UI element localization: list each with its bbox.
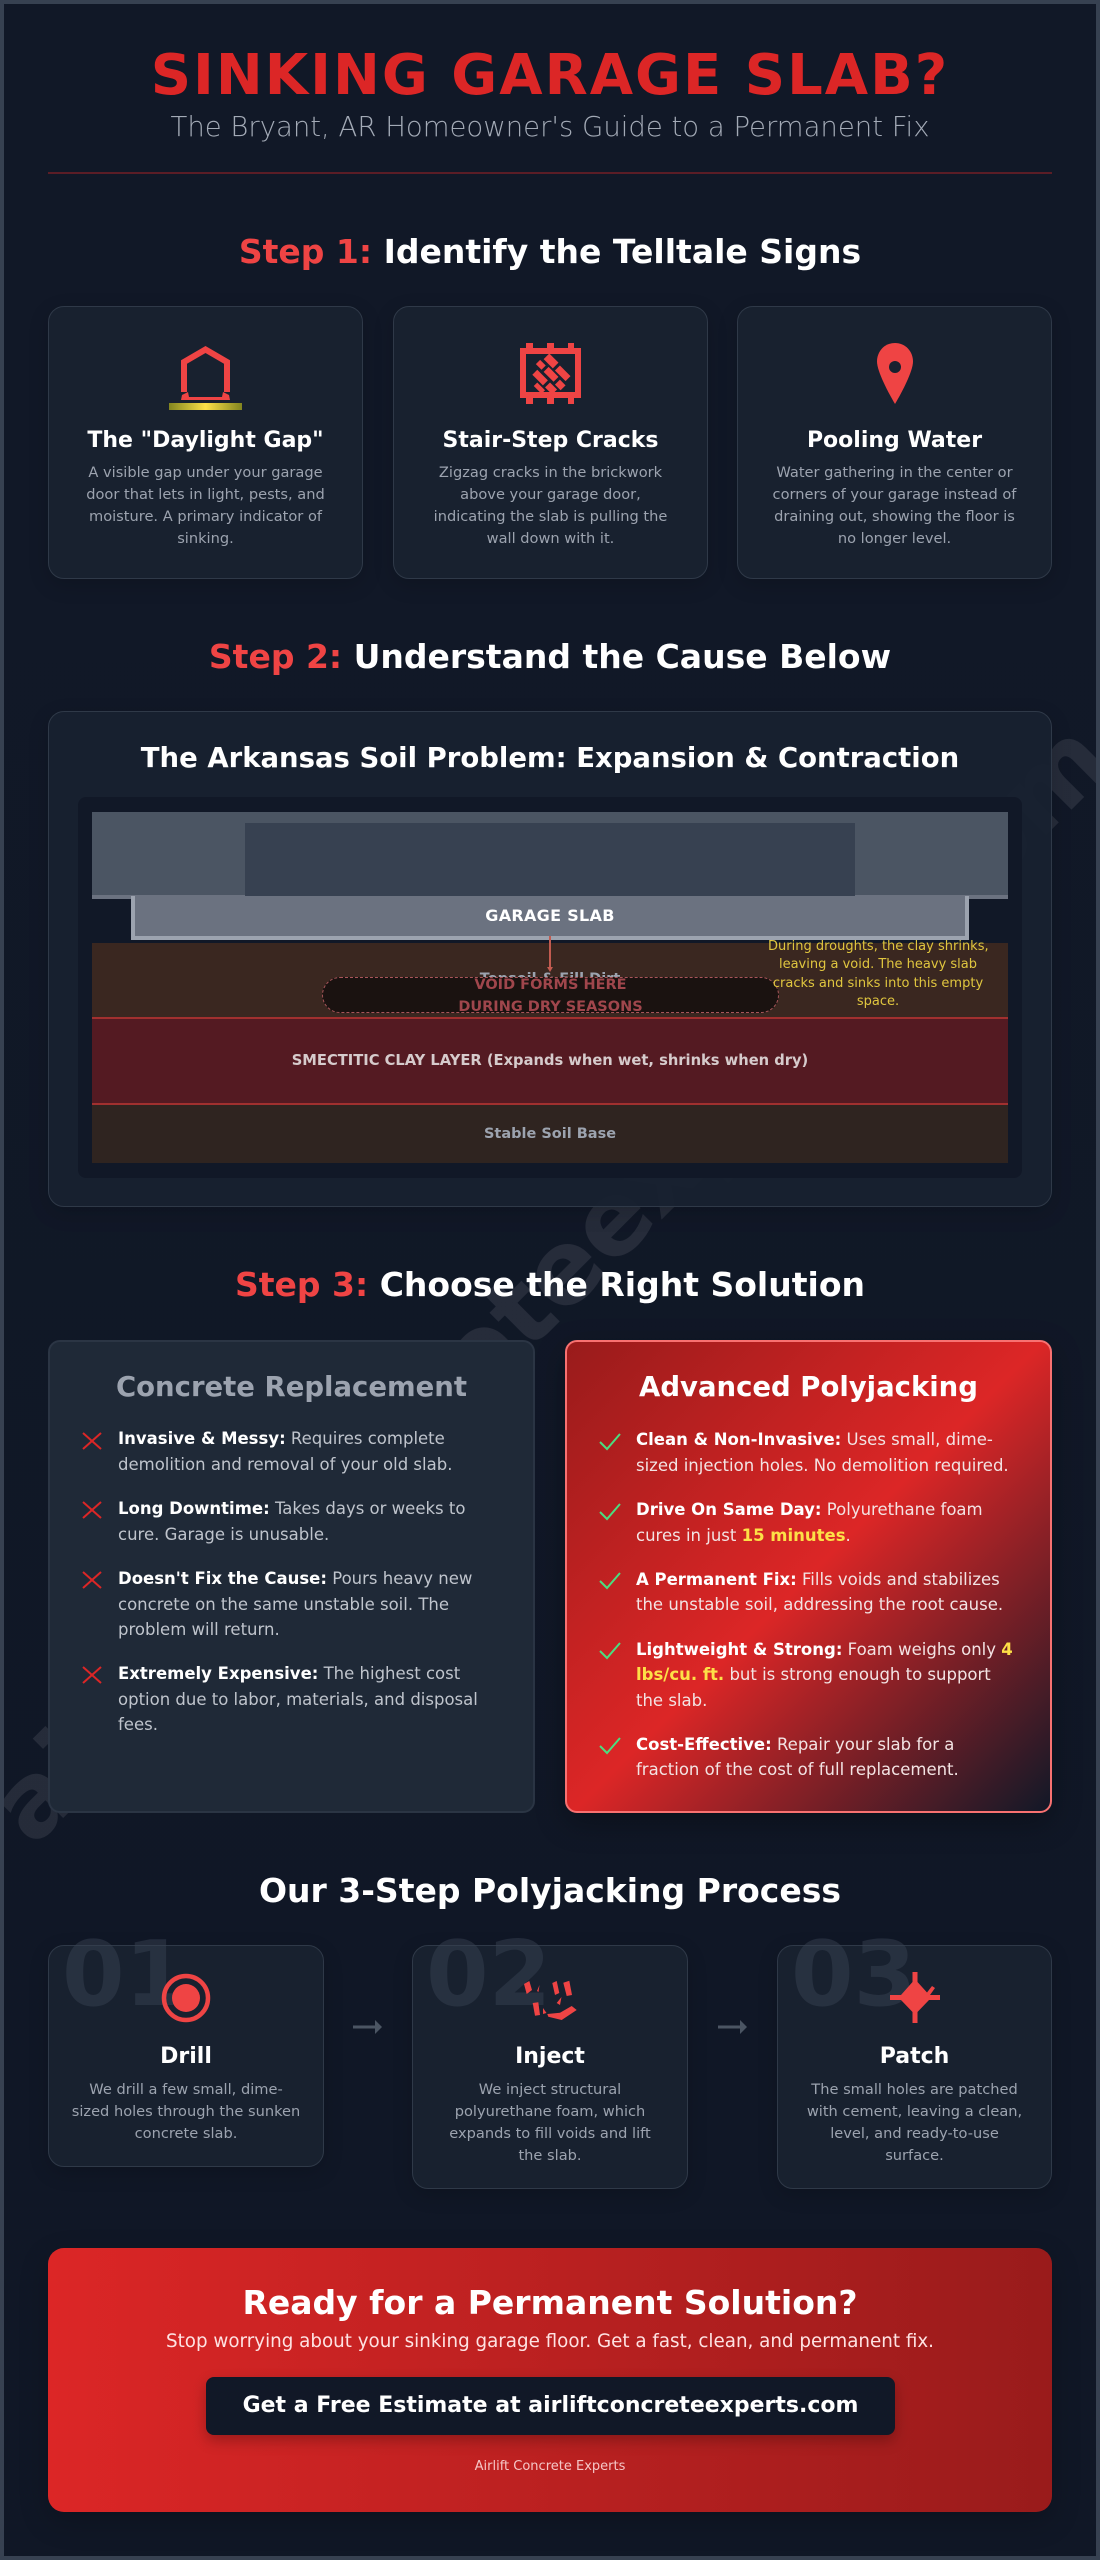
step description: the slab. xyxy=(518,2147,582,2164)
garage slab xyxy=(131,896,969,940)
item: clean xyxy=(636,1430,1009,1475)
item: expensive: Extremely Expensive: The highest cost xyxy=(118,1664,460,1683)
drought callout: space. xyxy=(857,994,899,1009)
icon: x xyxy=(82,1501,102,1519)
card description: indicating the slab is pulling the xyxy=(434,508,667,525)
card description: sinking. xyxy=(177,530,234,547)
icon: x xyxy=(82,1666,102,1684)
panel: advanced polyjacking xyxy=(565,1340,1052,1813)
garage slab: GARAGE SLAB xyxy=(485,906,615,925)
icon: check xyxy=(599,1737,621,1754)
subtitle: The Bryant, AR Homeowner's Guide to a Permanent Fix xyxy=(171,111,929,143)
icon: x xyxy=(82,1571,102,1589)
item: same day xyxy=(636,1500,983,1545)
step description: level, and ready-to-use xyxy=(830,2125,999,2142)
arrow: step 1 to 2 xyxy=(353,2020,382,2034)
icon: cracked brick wall xyxy=(520,343,581,404)
step title: Drill xyxy=(160,2044,212,2069)
card description: door that lets in light, pests, and xyxy=(86,486,325,503)
panel heading: Concrete Replacement xyxy=(116,1371,467,1403)
item: downtime: Long Downtime: Takes days or weeks to xyxy=(118,1499,465,1518)
step number 02: 02 xyxy=(426,1922,551,2027)
panel: sign pooling water xyxy=(737,306,1052,579)
item: cause xyxy=(118,1569,472,1639)
drought callout: cracks and sinks into this empty xyxy=(773,976,983,991)
wall section xyxy=(92,812,1008,899)
item: permanent: the unstable soil, addressing the root cause. xyxy=(636,1595,1003,1614)
icon: drill hole xyxy=(162,1974,210,2022)
arrow: step 2 to 3 xyxy=(718,2020,747,2034)
drought callout xyxy=(768,939,989,1009)
item: same day: cures in just 15 minutes. xyxy=(636,1526,851,1545)
item: permanent: A Permanent Fix: Fills voids and stabilizes xyxy=(636,1570,1000,1588)
item: invasive: Invasive & Messy: Requires complete xyxy=(118,1429,445,1448)
cta button: Get a Free Estimate at airliftconcreteexperts.com xyxy=(243,2393,858,2418)
step number 03: 03 xyxy=(791,1922,916,2027)
topsoil layer xyxy=(92,943,1008,1018)
icon: foam injection xyxy=(524,1980,577,2020)
heading: process: Our 3-Step Polyjacking Process xyxy=(259,1871,841,1910)
step description: expands to fill voids and lift xyxy=(449,2125,651,2142)
card description xyxy=(773,464,1017,547)
step description: The small holes are patched xyxy=(811,2081,1018,2098)
step description xyxy=(72,2081,300,2142)
step description: concrete slab. xyxy=(135,2125,237,2142)
card title: Stair-Step Cracks xyxy=(442,428,659,453)
heading: step 3: Step 3: Choose the Right Solution xyxy=(235,1265,865,1304)
item: invasive xyxy=(118,1429,452,1474)
card title: The "Daylight Gap" xyxy=(87,428,324,453)
icon: patch xyxy=(890,1972,940,2023)
item: same day: Drive On Same Day: Polyurethane foam xyxy=(636,1500,983,1519)
item: downtime xyxy=(118,1499,465,1544)
card description: wall down with it. xyxy=(487,530,614,547)
diagram heading: The Arkansas Soil Problem: Expansion & Contraction xyxy=(141,742,959,774)
cta subtext: Stop worrying about your sinking garage floor. Get a fast, clean, and permanent fix. xyxy=(166,2331,934,2352)
item: expensive: option due to labor, materials, and disposal xyxy=(118,1690,478,1709)
chart: soil cross-section xyxy=(78,797,1022,1178)
void under slab xyxy=(322,977,779,1013)
panel: process step 3 xyxy=(777,1945,1052,2189)
clay layer xyxy=(92,1017,1008,1105)
item: cost: Cost-Effective: Repair your slab for a xyxy=(636,1734,954,1754)
step number 01: 01 xyxy=(62,1922,187,2027)
drought callout: During droughts, the clay shrinks, xyxy=(768,939,989,954)
stable soil layer: Stable Soil Base xyxy=(484,1126,616,1142)
icon: check xyxy=(599,1503,621,1520)
footer brand: Airlift Concrete Experts xyxy=(475,2459,625,2474)
step description: We inject structural xyxy=(479,2081,621,2098)
item: cause: concrete on the same unstable soil. The xyxy=(118,1595,449,1614)
step description: sized holes through the sunken xyxy=(72,2103,300,2120)
cta button xyxy=(206,2377,895,2435)
void label: DURING DRY SEASONS xyxy=(458,999,643,1015)
card description xyxy=(434,464,667,547)
item: lightweight: Lightweight & Strong: Foam weighs only 4 xyxy=(636,1640,1013,1658)
icon: x xyxy=(82,1432,102,1450)
step description xyxy=(807,2081,1022,2164)
item: clean: sized injection holes. No demolition required. xyxy=(636,1456,1009,1475)
item: expensive xyxy=(118,1664,478,1734)
icon: check xyxy=(599,1572,621,1590)
item: lightweight xyxy=(636,1640,1013,1710)
item: downtime: cure. Garage is unusable. xyxy=(118,1525,329,1544)
item: permanent xyxy=(636,1570,1003,1614)
panel: concrete replacement xyxy=(48,1340,535,1813)
card description xyxy=(86,464,325,547)
step description xyxy=(449,2081,651,2164)
heading: step 1: Step 1: Identify the Telltale Signs xyxy=(239,232,861,271)
item: cost: fraction of the cost of full replacement. xyxy=(636,1760,959,1779)
cta title: Ready for a Permanent Solution? xyxy=(242,2283,858,2322)
panel: process step 1 xyxy=(48,1945,324,2167)
title: SINKING GARAGE SLAB? xyxy=(151,43,949,108)
clay layer: SMECTITIC CLAY LAYER (Expands when wet, shrinks when dry) xyxy=(292,1052,808,1069)
icon: location pin water xyxy=(877,343,913,404)
panel heading: Advanced Polyjacking xyxy=(639,1371,978,1403)
card description: moisture. A primary indicator of xyxy=(89,508,322,525)
item: invasive: demolition and removal of your old slab. xyxy=(118,1455,452,1474)
icon: garage daylight gap xyxy=(169,346,242,410)
card description: above your garage door, xyxy=(460,486,641,503)
item: lightweight: the slab. xyxy=(636,1691,707,1710)
card title: Pooling Water xyxy=(807,428,982,453)
item: expensive: fees. xyxy=(118,1715,158,1734)
icon: check xyxy=(599,1642,621,1660)
item: cost xyxy=(636,1734,959,1779)
card description: no longer level. xyxy=(838,530,951,547)
void label: VOID FORMS HERE xyxy=(474,977,627,993)
item: clean: Clean & Non-Invasive: Uses small, dime- xyxy=(636,1430,993,1449)
card description: draining out, showing the floor is xyxy=(774,508,1015,525)
step description: with cement, leaving a clean, xyxy=(807,2103,1022,2120)
card description: Zigzag cracks in the brickwork xyxy=(439,464,662,481)
step description: surface. xyxy=(885,2147,944,2164)
panel: sign daylight gap xyxy=(48,306,363,579)
void label xyxy=(458,977,643,1015)
header divider xyxy=(48,172,1052,174)
arrow: slab to void xyxy=(547,936,553,972)
item: cause: problem will return. xyxy=(118,1620,280,1639)
panel: process step 2 xyxy=(412,1945,688,2189)
card description: A visible gap under your garage xyxy=(88,464,323,481)
drought callout: leaving a void. The heavy slab xyxy=(779,957,977,972)
step description: We drill a few small, dime- xyxy=(89,2081,283,2098)
topsoil layer: Topsoil & Fill Dirt xyxy=(480,971,620,987)
panel: soil diagram xyxy=(48,711,1052,1207)
garage door recess xyxy=(245,823,855,896)
panel: call to action xyxy=(48,2248,1052,2512)
card description: Water gathering in the center or xyxy=(776,464,1013,481)
heading: step 2: Step 2: Understand the Cause Below xyxy=(209,637,891,676)
card description: corners of your garage instead of xyxy=(773,486,1016,503)
item: cause: Doesn't Fix the Cause: Pours heavy new xyxy=(118,1569,472,1588)
icon: check xyxy=(599,1433,621,1450)
stable soil layer xyxy=(92,1105,1008,1163)
step title: Inject xyxy=(515,2044,585,2069)
panel: sign stair-step cracks xyxy=(393,306,708,579)
step title: Patch xyxy=(880,2044,949,2069)
item: lightweight: lbs/cu. ft. but is strong enough to support xyxy=(636,1665,991,1684)
step description: polyurethane foam, which xyxy=(455,2103,645,2120)
